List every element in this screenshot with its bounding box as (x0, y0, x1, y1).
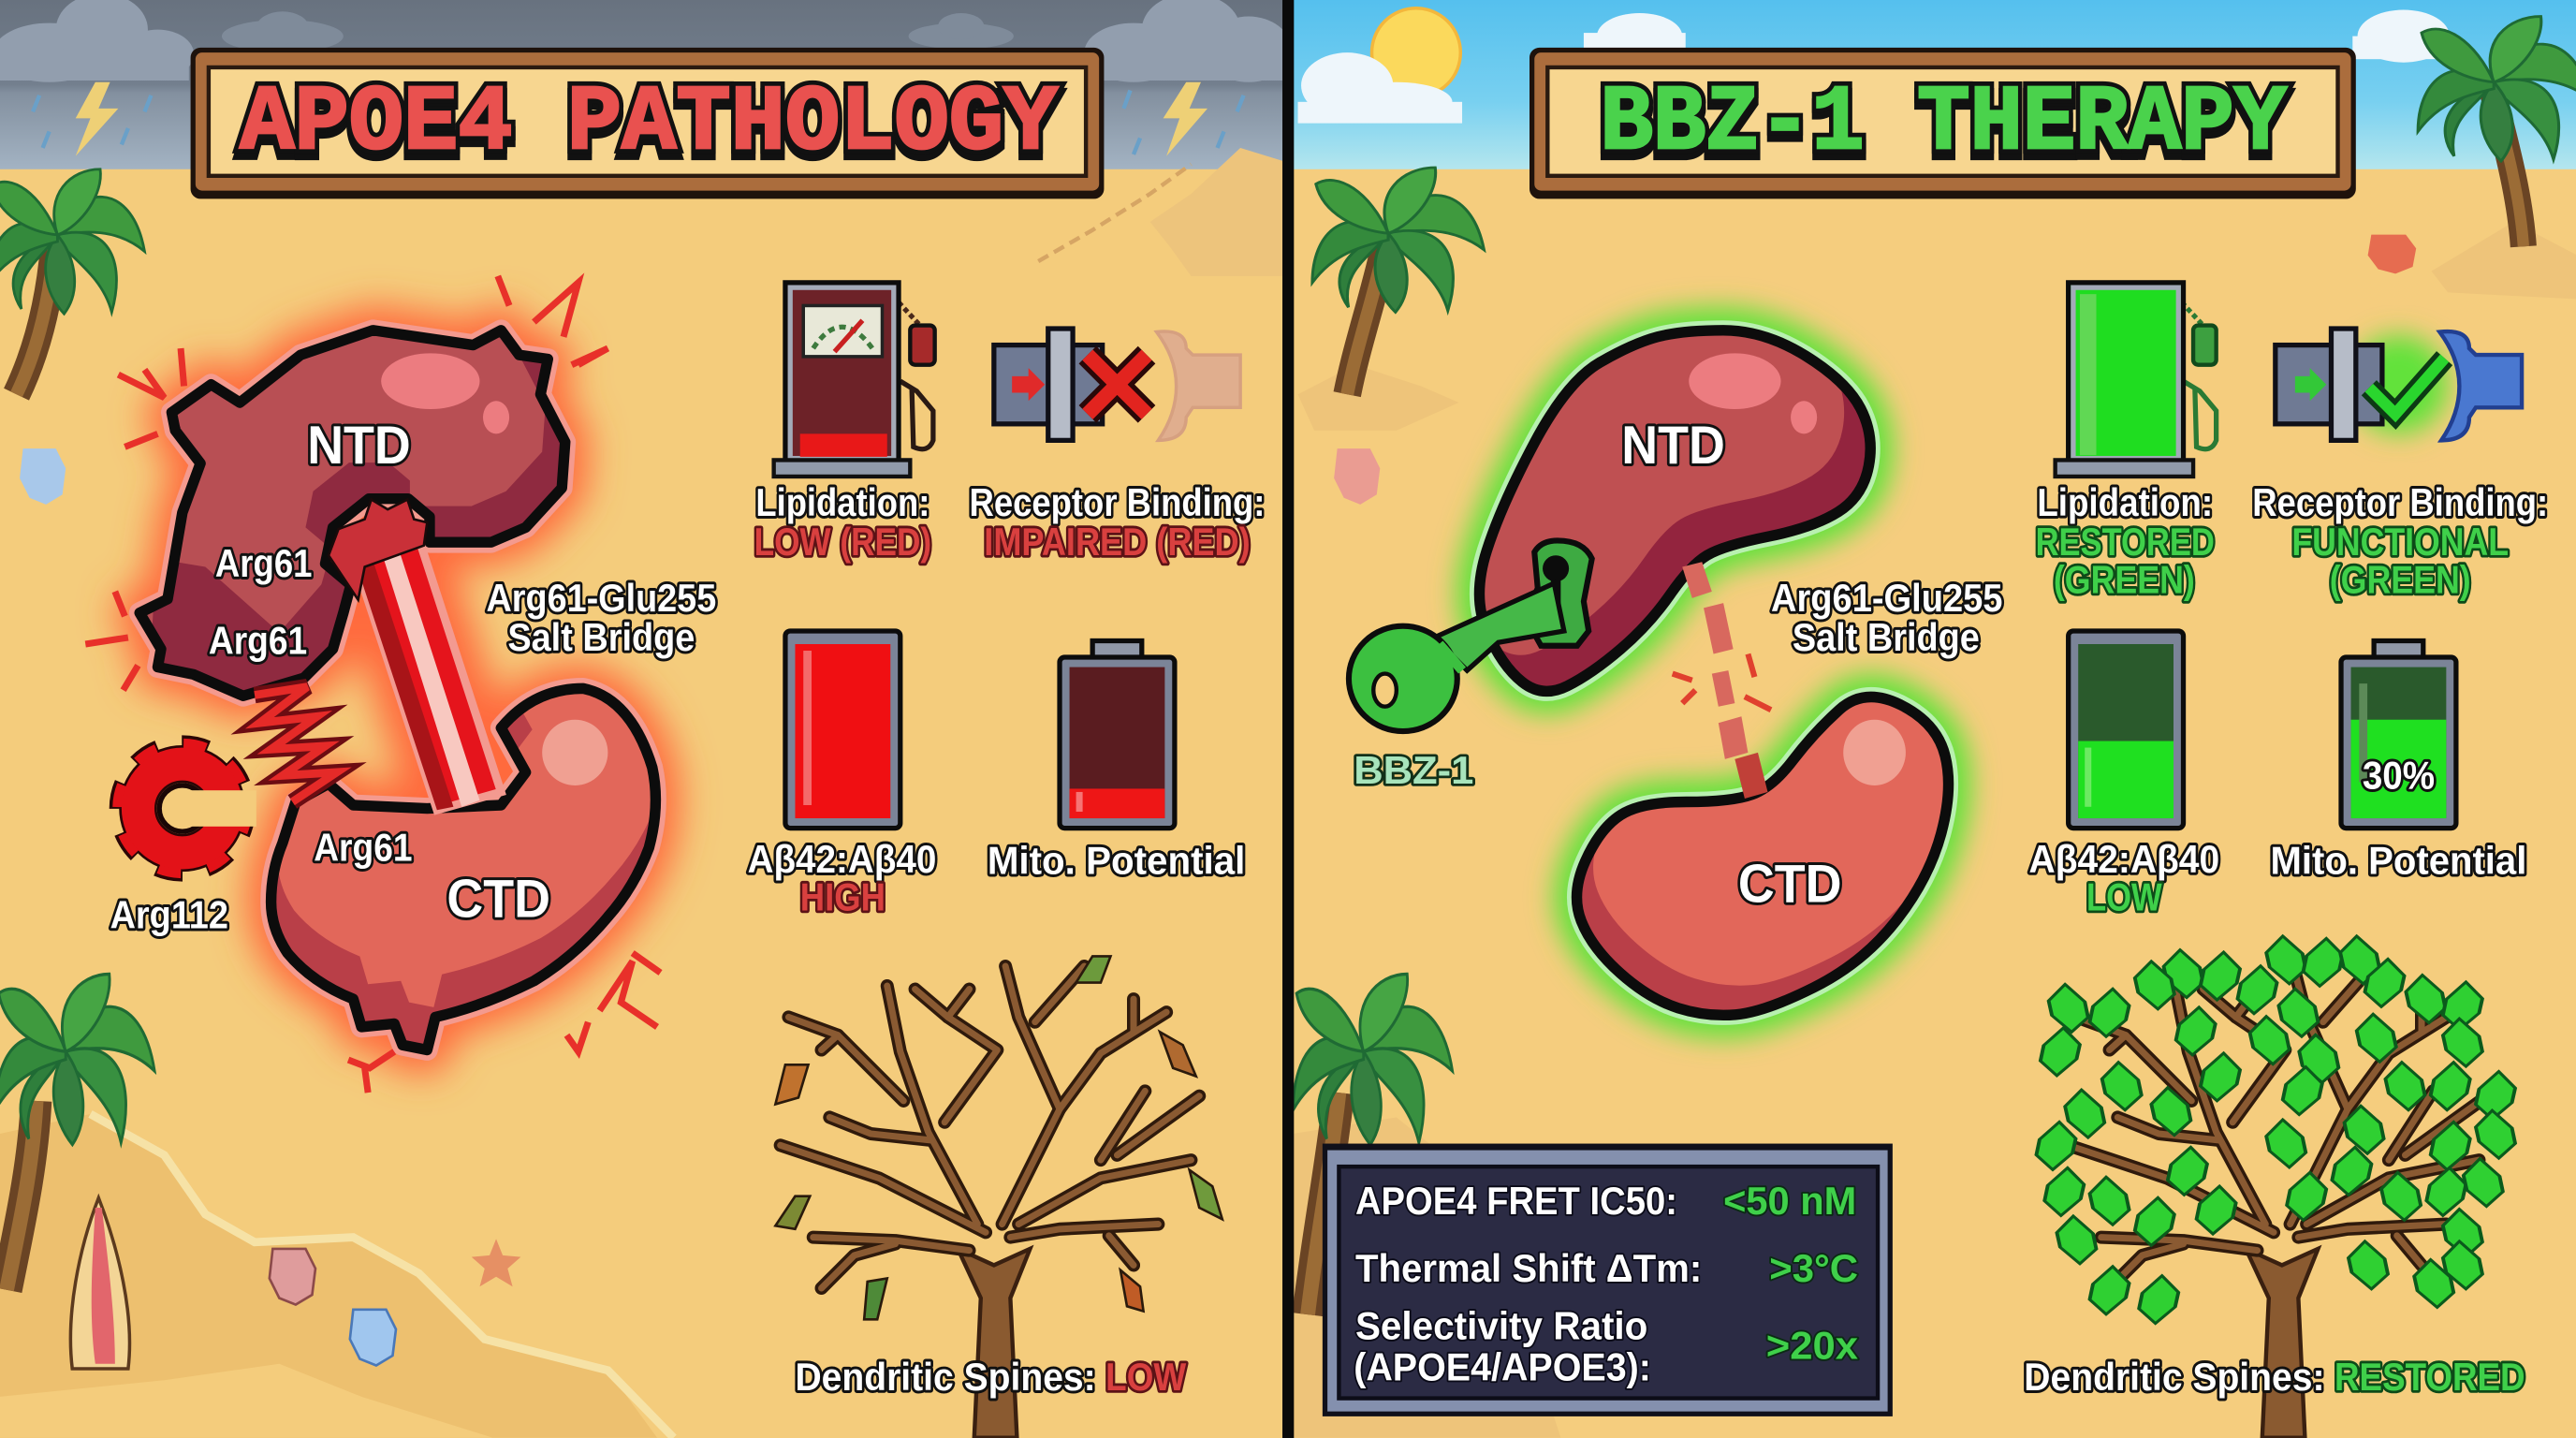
label ratio: HIGH (800, 874, 886, 918)
label lipidation (2036, 480, 2215, 602)
panel: BBZ-1 therapy background (1293, 0, 2576, 1438)
NTD domain (120, 294, 565, 707)
row selectivity: (APOE4/APOE3): (1354, 1344, 1651, 1388)
sand dune top right (1150, 148, 1283, 276)
metric: mito potential low (988, 640, 1245, 883)
dune behind palm left (1298, 365, 1459, 431)
heading: APOE4 PATHOLOGY: APOE4 PATHOLOGY (240, 71, 1058, 176)
BBZ-1 bound protein diagram (1349, 294, 2002, 1015)
label receptor binding (970, 480, 1265, 564)
icon: green battery (2341, 640, 2456, 829)
sun (1372, 8, 1460, 97)
heading: BBZ-1 THERAPY: BBZ-1 THERAPY (1600, 78, 2287, 183)
label NTD: NTD (1621, 416, 1725, 476)
label salt bridge: Arg61-Glu255 (1771, 576, 2002, 620)
label Arg61 lower: Arg61 (209, 619, 307, 663)
healthy tree with green leaves (2024, 936, 2525, 1438)
shell pink (270, 1249, 315, 1305)
metric: amyloid ratio low (2029, 631, 2219, 918)
storm cloud small right (909, 13, 1014, 50)
heading: APOE4 PATHOLOGY: APOE4 PATHOLOGY (240, 78, 1058, 183)
lightning right (1164, 82, 1208, 156)
dead tree with few leaves (775, 956, 1222, 1438)
stormy sky (0, 0, 1283, 169)
label mito potential: Mito. Potential (988, 839, 1245, 883)
shell red (2368, 235, 2416, 273)
palm tree right (2418, 17, 2576, 246)
branches (781, 966, 1199, 1288)
heading: BBZ-1 THERAPY: BBZ-1 THERAPY (1600, 71, 2287, 176)
label lipidation: RESTORED (2036, 520, 2215, 564)
lightning left (76, 82, 118, 156)
label lipidation: LOW (RED) (754, 520, 931, 564)
NTD domain (1453, 294, 1870, 691)
CTD domain (271, 646, 662, 1050)
green glow (1479, 330, 1949, 1015)
row selectivity (1354, 1303, 1859, 1388)
label lipidation: (GREEN) (2054, 558, 2195, 602)
icon: nearly empty battery (1060, 640, 1175, 829)
label Arg61 upper: Arg61 (215, 541, 312, 585)
label dendritic spines: RESTORED (2334, 1355, 2525, 1399)
shell blue bottom (350, 1310, 396, 1365)
shore foam line (91, 1114, 674, 1438)
shell pink (1334, 448, 1380, 505)
label Arg112: Arg112 (110, 893, 228, 937)
palm tree top left (0, 169, 144, 394)
label ratio (748, 837, 936, 918)
label dendritic spines (2024, 1355, 2525, 1399)
storm cloud small left (222, 11, 344, 52)
data table: binding metrics (1323, 1144, 1893, 1416)
label lipidation: Lipidation: (2037, 480, 2213, 524)
label CTD: CTD (1738, 855, 1841, 915)
surfboard (70, 1197, 129, 1369)
center divider (1282, 0, 1294, 1438)
label mito potential: Mito. Potential (2271, 839, 2526, 883)
metric: mito potential 30 percent (2271, 640, 2526, 883)
metric: amyloid ratio high (748, 631, 936, 918)
label dendritic spines: Dendritic Spines: (795, 1355, 1096, 1399)
gear Arg112 (122, 748, 256, 869)
dune ridge line (1038, 165, 1191, 261)
BBZ-1 key (1349, 540, 1592, 731)
label receptor binding: FUNCTIONAL (2291, 520, 2509, 564)
palm tree lower (1294, 974, 1453, 1314)
metric: lipidation low (754, 283, 935, 564)
green leaves (2036, 936, 2515, 1324)
row IC50: <50 nM (1723, 1179, 1856, 1223)
icon: receptor with wrench and X (994, 329, 1240, 440)
title plaque: BBZ-1 Therapy (1530, 48, 2356, 198)
heading: APOE4 PATHOLOGY: APOE4 PATHOLOGY (240, 71, 1058, 176)
row selectivity: Selectivity Ratio (1355, 1303, 1647, 1347)
broken salt bridge fragments (1682, 562, 1767, 799)
sunny sky (1293, 0, 2576, 169)
APOE4 misfolded protein diagram (85, 276, 716, 1093)
lower dune (0, 1364, 493, 1438)
label receptor binding (2252, 480, 2548, 602)
palm tree lower left (0, 974, 154, 1290)
label lipidation: Lipidation: (755, 480, 929, 524)
broken bridge sparks (1673, 654, 1771, 710)
label salt bridge: Arg61-Glu255 (487, 576, 716, 620)
label receptor binding: Receptor Binding: (970, 480, 1265, 524)
label Arg61 CTD: Arg61 (314, 826, 413, 870)
icon: low green gauge (2069, 631, 2184, 829)
label dendritic spines: LOW (1105, 1355, 1186, 1399)
panel: APOE4 pathology background (0, 0, 1292, 1438)
dune behind palm right (2432, 222, 2576, 299)
trunk (958, 1249, 1030, 1438)
branches (2069, 966, 2487, 1288)
trunk (2246, 1249, 2318, 1438)
label NTD: NTD (307, 416, 411, 476)
label receptor binding: IMPAIRED (RED) (984, 520, 1251, 564)
icon: full green fuel pump (2056, 283, 2217, 477)
label CTD: CTD (446, 869, 550, 929)
icon: full red gauge (785, 631, 900, 829)
row IC50: APOE4 FRET IC50: (1355, 1179, 1677, 1223)
metric: lipidation restored (2036, 283, 2217, 602)
wet sand shore (0, 1114, 657, 1438)
row thermal shift: >3°C (1769, 1246, 1858, 1290)
title plaque: APOE4 Pathology (191, 48, 1104, 198)
shell blue (20, 448, 66, 505)
palm tree left (1312, 168, 1484, 394)
label dendritic spines: Dendritic Spines: (2024, 1355, 2324, 1399)
glow around protein (139, 330, 655, 1050)
cloud middle (1584, 13, 1686, 59)
rain streaks (33, 91, 1244, 154)
label ratio (2029, 837, 2219, 918)
CTD domain (1577, 668, 1965, 1015)
sparks (85, 276, 661, 1093)
starfish (472, 1239, 520, 1286)
label BBZ-1: BBZ-1 (1354, 748, 1473, 792)
label salt bridge: Salt Bridge (1793, 615, 1980, 659)
label ratio: Aβ42:Aβ40 (2029, 837, 2219, 881)
withered leaves (775, 956, 1222, 1319)
spring zigzag (255, 687, 337, 801)
icon: fuel pump low (774, 283, 935, 477)
label ratio: Aβ42:Aβ40 (748, 837, 936, 881)
cloud left (1298, 52, 1462, 124)
metric: receptor binding impaired (970, 329, 1265, 564)
wet sand lower (1293, 1117, 1560, 1438)
salt bridge bar (329, 500, 501, 810)
metric: receptor binding functional (2252, 329, 2548, 602)
label receptor binding: (GREEN) (2330, 558, 2471, 602)
icon: receptor with key wrench and check (2276, 329, 2522, 440)
label lipidation (754, 480, 931, 564)
label 30 percent: 30% (2363, 753, 2435, 797)
heading: BBZ-1 THERAPY: BBZ-1 THERAPY (1600, 71, 2287, 176)
label salt bridge (487, 576, 716, 659)
label ratio: LOW (2086, 874, 2162, 918)
label salt bridge: Salt Bridge (507, 615, 695, 659)
label salt bridge (1771, 576, 2002, 659)
storm cloud left (0, 0, 194, 82)
row thermal shift: Thermal Shift ΔTm: (1355, 1246, 1702, 1290)
storm cloud right (1084, 0, 1292, 82)
row selectivity: >20x (1766, 1323, 1859, 1367)
cloud right (2352, 10, 2454, 63)
